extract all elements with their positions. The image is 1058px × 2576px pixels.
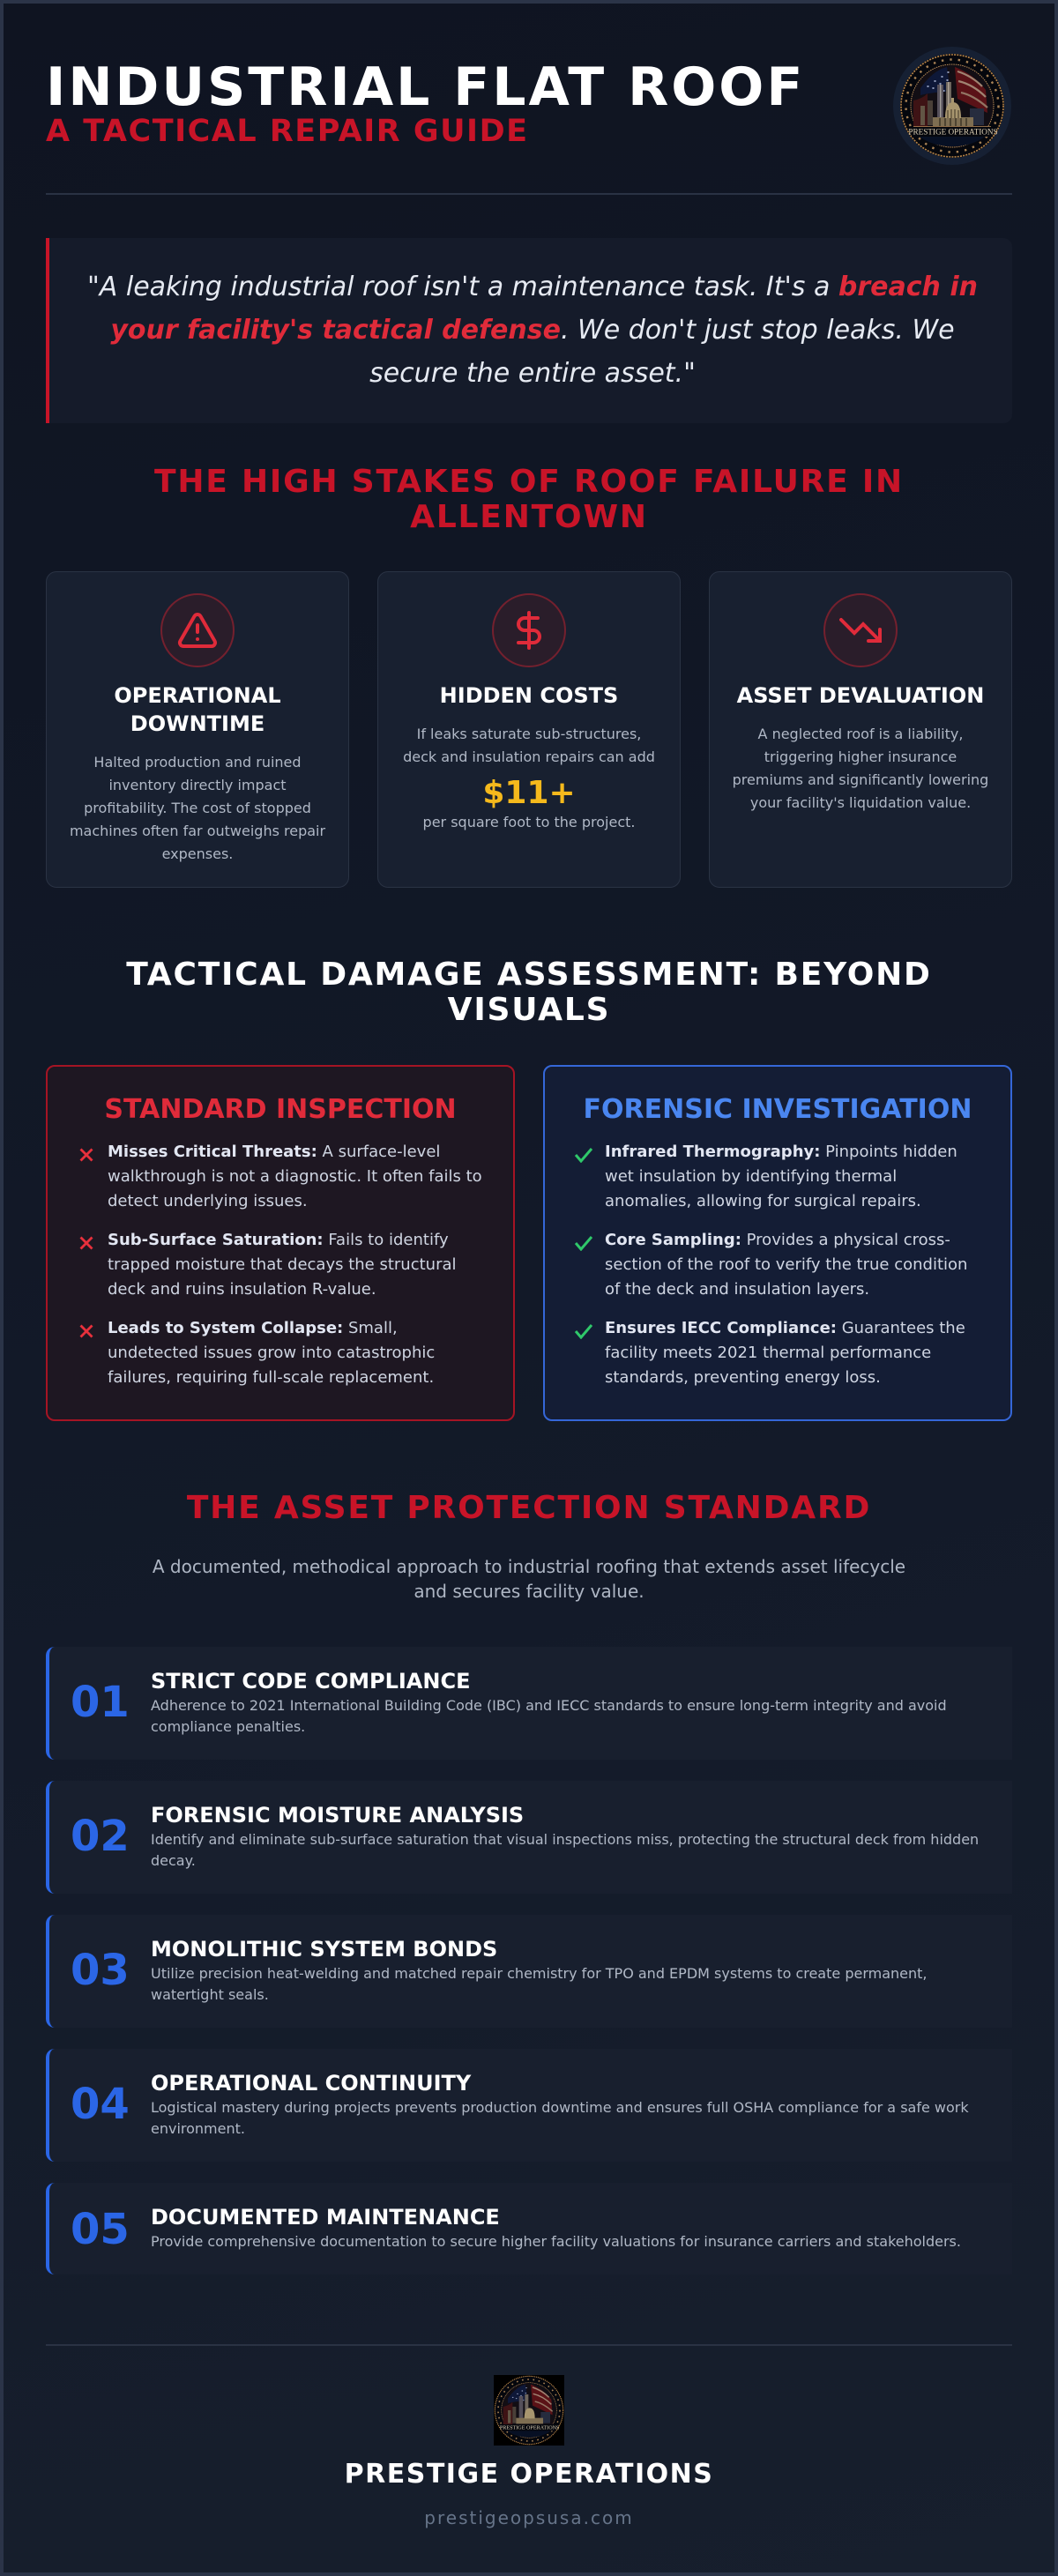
panel: quote [46, 238, 1012, 423]
step 03 [46, 1915, 1012, 2028]
heading: high stakes [154, 464, 904, 535]
quote text: "A leaking industrial roof isn't a maintenance task. It's a breach in [87, 272, 978, 302]
item: sub-surface saturation: deck and ruins insulation R-value. [108, 1280, 376, 1299]
icon: check [575, 1148, 592, 1163]
item: ensures iecc compliance: Ensures IECC Compliance: Guarantees the [605, 1319, 965, 1337]
header divider [46, 193, 1012, 195]
step text: Logistical mastery during projects prevents production downtime and ensures full OSHA compliance for a safe work [151, 2099, 969, 2116]
subtitle: A TACTICAL REPAIR GUIDE [46, 114, 529, 149]
card text: deck and insulation repairs can add [403, 748, 655, 765]
section intro text: and secures facility value. [414, 1581, 644, 1602]
item: misses critical threats: Misses Critical Threats: A surface-level [108, 1143, 440, 1161]
panel heading: STANDARD INSPECTION [104, 1094, 457, 1125]
card text: premiums and significantly lowering [733, 771, 988, 788]
card text: per square foot to the project. [423, 814, 635, 830]
card text [70, 754, 326, 862]
step text [151, 1831, 979, 1869]
stat: $11+: $11+ [482, 775, 576, 811]
step 04 [46, 2049, 1012, 2162]
card text: If leaks saturate sub-structures, [417, 726, 641, 742]
item: misses critical threats: walkthrough is not a diagnostic. It often fails to [108, 1167, 482, 1186]
item: core sampling: section of the roof to verify the true condition [605, 1255, 967, 1274]
item: misses critical threats [108, 1143, 482, 1210]
item: leads to system collapse: undetected issues grow into catastrophic [108, 1344, 435, 1362]
step text: Provide comprehensive documentation to secure higher facility valuations for insurance carriers and stakeholders. [151, 2233, 961, 2250]
heading: tactical damage assessment [126, 957, 932, 1028]
item: sub-surface saturation [108, 1231, 457, 1299]
card heading: OPERATIONAL [114, 683, 281, 708]
item: infrared thermography [605, 1143, 957, 1210]
panel: operational downtime [46, 571, 349, 888]
step text: environment. [151, 2120, 245, 2137]
card text: machines often far outweighs repair [70, 823, 325, 839]
quote text [87, 272, 978, 389]
item: core sampling [605, 1231, 967, 1299]
item: leads to system collapse [108, 1319, 435, 1387]
step number: 03 [71, 1946, 130, 1995]
step 02 [46, 1781, 1012, 1894]
item: core sampling: of the deck and insulation layers. [605, 1280, 869, 1299]
title: INDUSTRIAL FLAT ROOF [46, 56, 805, 118]
step text [151, 1965, 927, 2003]
panel: standard inspection [46, 1065, 515, 1421]
footer website: prestigeopsusa.com [424, 2507, 634, 2528]
icon: check [575, 1236, 592, 1251]
card text: inventory directly impact [108, 777, 287, 793]
step text: Identify and eliminate sub-surface saturation that visual inspections miss, protecting the structural deck from hidden [151, 1831, 979, 1848]
item: ensures iecc compliance: facility meets 2021 thermal performance [605, 1344, 931, 1362]
step title: OPERATIONAL CONTINUITY [151, 2071, 471, 2096]
icon: footer seal logo [494, 2375, 564, 2446]
step title: DOCUMENTED MAINTENANCE [151, 2205, 500, 2230]
card text: A neglected roof is a liability, [758, 726, 963, 742]
item: infrared thermography: Infrared Thermography: Pinpoints hidden [605, 1143, 957, 1161]
panel heading: FORENSIC INVESTIGATION [584, 1094, 972, 1125]
step text: Utilize precision heat-welding and matched repair chemistry for TPO and EPDM systems to create permanent, [151, 1965, 927, 1982]
item: core sampling: Core Sampling: Provides a physical cross- [605, 1231, 950, 1249]
item: infrared thermography: anomalies, allowing for surgical repairs. [605, 1192, 921, 1210]
step title: FORENSIC MOISTURE ANALYSIS [151, 1803, 524, 1828]
quote text: secure the entire asset." [369, 358, 696, 389]
icon: cross [79, 1324, 93, 1338]
icon: footer seal logo: PRESTIGE OPERATIONS [500, 2426, 560, 2431]
section intro text [153, 1556, 905, 1602]
item: ensures iecc compliance: standards, preventing energy loss. [605, 1368, 881, 1387]
step 05 [46, 2183, 1012, 2274]
card text [733, 726, 988, 811]
card text: expenses. [162, 845, 233, 862]
card text [403, 726, 655, 765]
heading: high stakes: THE HIGH STAKES OF ROOF FAILURE IN [154, 464, 904, 500]
step text [151, 1697, 947, 1735]
card heading [114, 683, 281, 736]
step number: 05 [71, 2205, 130, 2254]
item: infrared thermography: wet insulation by identifying thermal [605, 1167, 897, 1186]
item: leads to system collapse: Leads to System Collapse: Small, [108, 1319, 398, 1337]
card heading: HIDDEN COSTS [440, 683, 618, 708]
icon: dollar sign [492, 593, 566, 667]
item: misses critical threats: detect underlying issues. [108, 1192, 308, 1210]
item: sub-surface saturation: trapped moisture that decays the structural [108, 1255, 457, 1274]
step number: 04 [71, 2080, 130, 2129]
section intro text: A documented, methodical approach to industrial roofing that extends asset lifecycle [153, 1556, 905, 1577]
step text: Adherence to 2021 International Building Code (IBC) and IECC standards to ensure long-term integrity and avoid [151, 1697, 947, 1714]
step text: compliance penalties. [151, 1718, 305, 1735]
heading: tactical damage assessment: TACTICAL DAMAGE ASSESSMENT: BEYOND [126, 957, 932, 993]
heading: tactical damage assessment: VISUALS [448, 992, 610, 1028]
card text: Halted production and ruined [93, 754, 302, 771]
card text: profitability. The cost of stopped [84, 800, 311, 816]
card heading: DOWNTIME [130, 711, 264, 736]
quote text: your facility's tactical defense. We don't just stop leaks. We [110, 315, 955, 346]
item: sub-surface saturation: Sub-Surface Saturation: Fails to identify [108, 1231, 449, 1249]
panel: hidden costs [377, 571, 681, 888]
step text [151, 2099, 969, 2137]
panel: forensic investigation [543, 1065, 1012, 1421]
heading: high stakes: ALLENTOWN [410, 499, 648, 535]
item: leads to system collapse: failures, requiring full-scale replacement. [108, 1368, 434, 1387]
step title: MONOLITHIC SYSTEM BONDS [151, 1937, 497, 1962]
step text: watertight seals. [151, 1986, 269, 2003]
step 01 [46, 1647, 1012, 1760]
step number: 02 [71, 1812, 130, 1861]
icon: cross [79, 1236, 93, 1250]
icon: cross [79, 1148, 93, 1162]
step number: 01 [71, 1678, 130, 1727]
icon: trending down [823, 593, 898, 667]
step text: decay. [151, 1852, 196, 1869]
step title: STRICT CODE COMPLIANCE [151, 1669, 470, 1694]
card text: triggering higher insurance [764, 748, 957, 765]
item: ensures iecc compliance [605, 1319, 965, 1387]
heading: asset protection standard: THE ASSET PROTECTION STANDARD [187, 1490, 871, 1526]
footer brand name: PRESTIGE OPERATIONS [345, 2459, 713, 2490]
icon: company seal logo: PRESTIGE OPERATIONS [908, 127, 998, 136]
icon: warning triangle [160, 593, 235, 667]
footer divider [46, 2344, 1012, 2346]
icon: check [575, 1324, 592, 1339]
card text: your facility's liquidation value. [750, 794, 971, 811]
card heading: ASSET DEVALUATION [737, 683, 984, 708]
panel: asset devaluation [709, 571, 1012, 888]
icon: company seal logo [893, 47, 1011, 165]
